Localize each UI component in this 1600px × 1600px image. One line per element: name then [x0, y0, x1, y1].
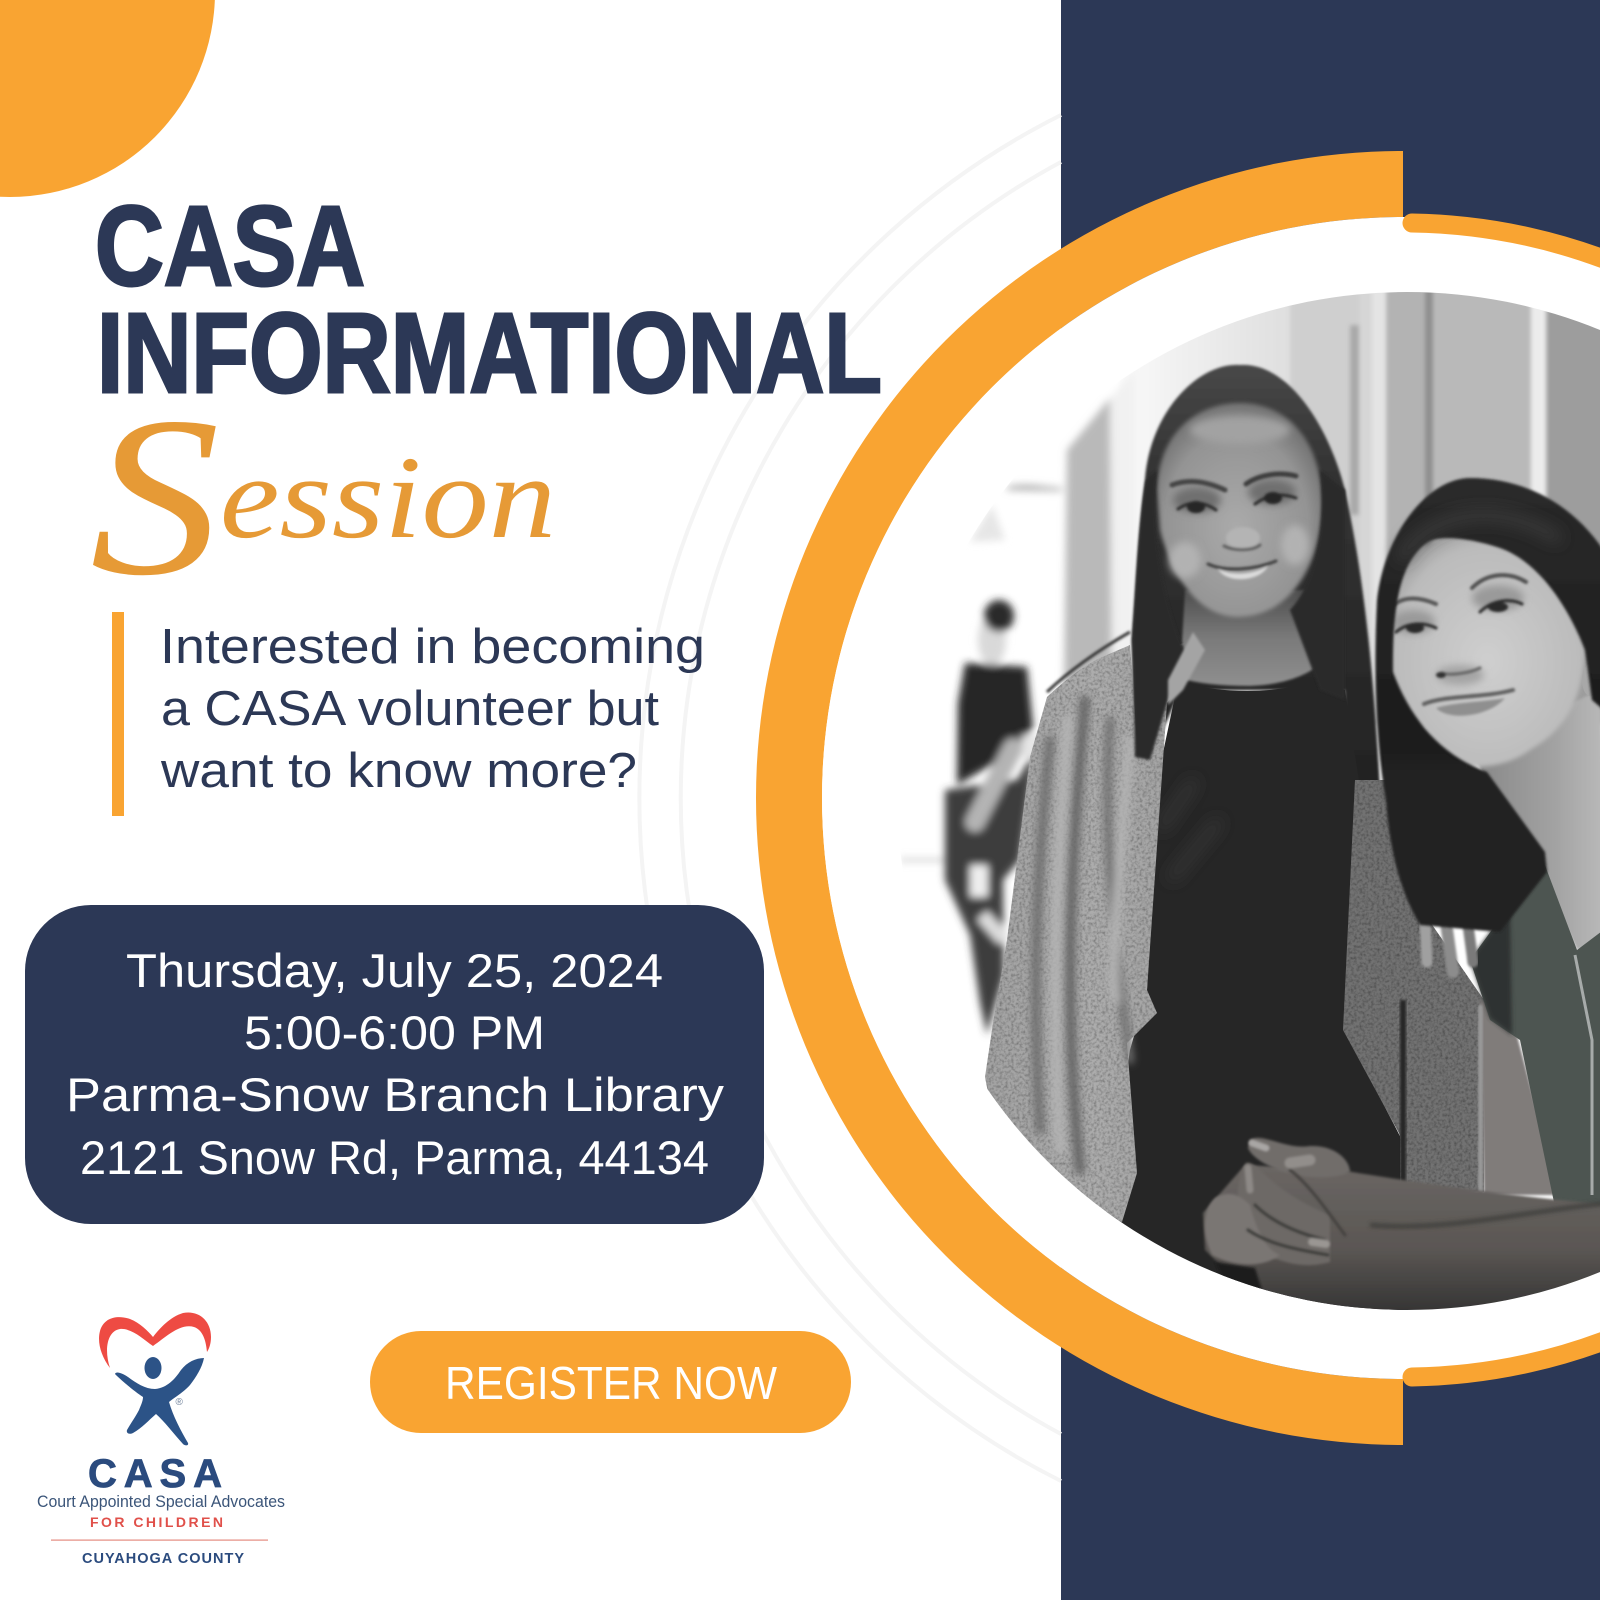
- woman: torso and arm skin: [1480, 1000, 1560, 1195]
- panel: event details: 5:00-6:00 PM: [244, 1006, 545, 1059]
- girl: hair wisp: [1047, 632, 1130, 692]
- script heading: Session: ession: [220, 432, 556, 563]
- right cardigan: [1343, 780, 1484, 1192]
- button: register now: [370, 1331, 851, 1433]
- text block: intro question: want to know more?: [160, 744, 637, 798]
- logo: CASA Cuyahoga County: CUYAHOGA COUNTY: [82, 1551, 244, 1567]
- panel: event details: Thursday, July 25, 2024: [126, 944, 663, 997]
- icon: blue figure: [115, 1357, 204, 1445]
- woman: fingers on shoulder: [1424, 900, 1473, 972]
- ring: thick orange arc: [756, 151, 1403, 1445]
- title: CASA Informational: INFORMATIONAL: [97, 290, 882, 416]
- background wall and columns: [900, 280, 1600, 862]
- photo: girl and woman in black and white: [890, 280, 1600, 1320]
- panel: event details: Parma-Snow Branch Library: [66, 1068, 725, 1121]
- logo: CASA Cuyahoga County: [37, 1312, 285, 1567]
- girl: neck: [1180, 590, 1325, 686]
- decorative faint rings: [639, 115, 1061, 1481]
- girl: face: [1157, 403, 1322, 617]
- text block: intro question: a CASA volunteer but: [161, 682, 659, 736]
- panel: event details: [25, 905, 764, 1224]
- white disc behind photo: [822, 217, 1600, 1379]
- title: CASA Informational: [95, 183, 882, 416]
- girl: left cardigan: [985, 640, 1200, 1222]
- top-left orange circle: [0, 0, 215, 197]
- script heading: Session: S: [90, 371, 220, 623]
- accent bar: [112, 612, 124, 816]
- logo: CASA Cuyahoga County: FOR CHILDREN: [90, 1514, 223, 1530]
- logo: CASA Cuyahoga County: Court Appointed Special Advocates: [37, 1493, 285, 1511]
- text block: intro question: [160, 620, 705, 798]
- icon: red heart: [99, 1312, 211, 1368]
- woman: hair: [1375, 478, 1600, 932]
- ring: thin orange arcs: [1412, 223, 1600, 1377]
- title: CASA Informational: CASA: [95, 183, 365, 309]
- panel: navy right column: [1061, 0, 1600, 1600]
- woman: green blouse: [1470, 860, 1600, 1215]
- girl: dark dress: [1090, 682, 1402, 1320]
- text block: intro question: Interested in becoming: [160, 620, 705, 674]
- panel: event details: 2121 Snow Rd, Parma, 44134: [80, 1131, 709, 1184]
- girl: front hair locks: [1132, 470, 1190, 760]
- woman: neck: [1470, 690, 1600, 950]
- logo: CASA Cuyahoga County: ®: [176, 1397, 184, 1408]
- blurred background figure: [945, 600, 1044, 1035]
- button: register now: REGISTER NOW: [445, 1357, 778, 1409]
- logo: CASA Cuyahoga County: CASA: [88, 1452, 222, 1496]
- girl: hair back: [1132, 365, 1380, 800]
- hands and forearms: [1203, 1138, 1600, 1320]
- girl: cardigan collar: [1168, 632, 1205, 705]
- woman: face: [1390, 532, 1598, 767]
